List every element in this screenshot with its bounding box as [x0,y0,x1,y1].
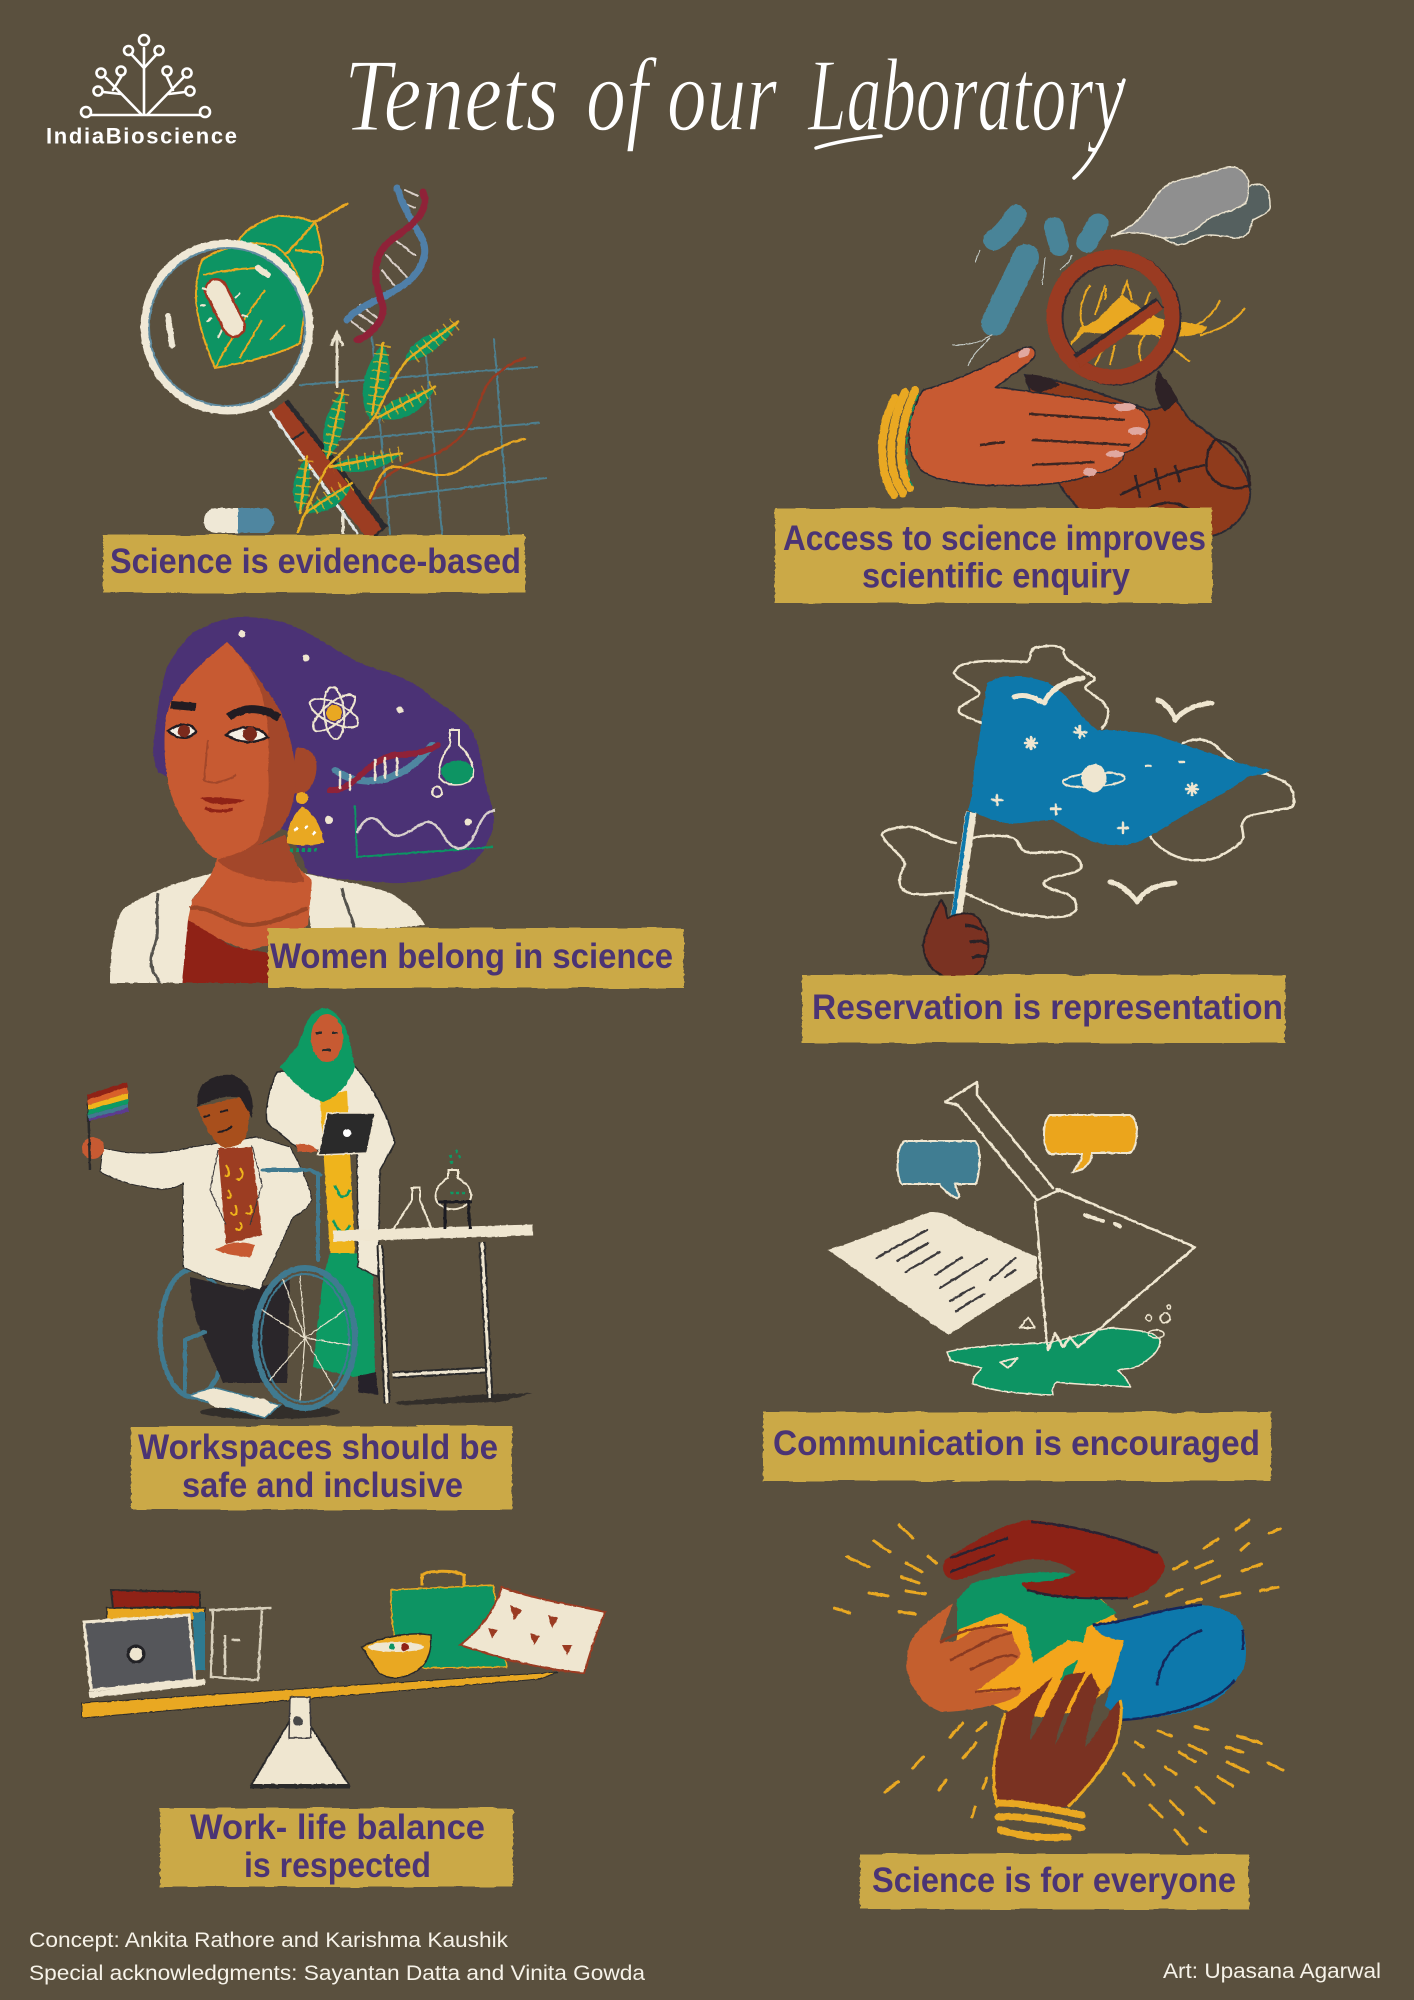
blue hand [1093,1605,1246,1720]
hand on lap [215,1243,255,1258]
back wheel [160,1269,226,1397]
shirt [182,920,270,983]
speech bubble: blue [897,1141,980,1198]
caption: workspaces should be safe and inclusive: safe and inclusive [182,1466,463,1505]
flask outline [945,1082,1195,1368]
raised hand [82,1137,104,1159]
title [344,38,1125,178]
title flourishes [816,80,1124,178]
caption: science is for everyone: Science is for everyone [872,1861,1236,1900]
magnifier handle [281,405,381,532]
ear [290,748,317,794]
yellow dress [320,1090,355,1253]
bacteria [994,215,1098,323]
books [111,1590,200,1608]
atom [306,686,362,740]
left hand [909,347,1149,486]
caption: access to science [775,508,1212,603]
mosquito [1067,295,1207,350]
credits: concept and acknowledgments [29,1929,645,1985]
coat [110,873,425,983]
caption: science is evidence-based: Science is evidence-based [110,542,521,581]
hair DNA [330,745,438,790]
footrest and shoes [188,1387,280,1418]
title: our [667,38,777,153]
credits: concept and acknowledgments: Special acknowledgments: Sayantan Datta and Vinita Gowda [29,1962,645,1985]
logo: IndiaBioscience: IndiaBioscience [46,124,237,148]
stars [992,726,1198,833]
illustration: communication flask [828,1082,1195,1395]
table [333,1230,533,1403]
beaker [209,1608,271,1680]
lens ring [145,244,309,410]
hijab [280,1008,355,1102]
top hand [943,1520,1165,1599]
left hand [907,1603,1021,1712]
credit: art: Art: Upasana Agarwal [1163,1960,1381,1983]
caption: reservation is representation [802,975,1285,1043]
caption: work-life balance is respected: is respected [244,1846,431,1885]
flask [439,730,473,785]
earring [296,792,308,804]
illustration: reservation flag [882,646,1294,992]
caption: access to science: Access to science improves [783,519,1206,558]
bowl [362,1634,431,1678]
pride flag [87,1082,129,1170]
green trousers [313,1253,375,1377]
right hand with henna [1025,371,1250,536]
woman coat [266,1067,395,1277]
caption: women belong in science [268,928,684,988]
globe [956,1577,1124,1717]
caption: work-life balance is respected: Work- life balance [190,1808,485,1847]
cloud [1163,184,1270,245]
caption: science is evidence-based [103,535,525,593]
rays [834,1520,1283,1844]
caption: communication is encouraged [763,1412,1271,1481]
credits: concept and acknowledgments: Concept: Ankita Rathore and Karishma Kaushik [29,1929,509,1952]
flag [968,677,1271,845]
lips [200,797,245,804]
illustration: access to science [882,167,1270,536]
saturn [1082,764,1106,792]
land [957,1572,1117,1663]
caption: workspaces should be safe and inclusive [131,1426,512,1510]
laptop [84,1615,195,1690]
illustration: work-life balance seesaw [82,1571,605,1787]
pill [204,508,238,533]
organism [216,290,234,326]
chart grid and curves [300,337,546,534]
caption: workspaces should be safe and inclusive: Workspaces should be [138,1428,498,1467]
birds [1014,678,1212,902]
pillow [460,1587,605,1673]
fulcrum [251,1707,349,1785]
illustration: safe and inclusive workspaces [82,1008,533,1419]
caption: access to science: scientific enquiry [862,556,1130,596]
green puddle [947,1328,1160,1395]
paper [828,1212,1037,1335]
plant [293,322,458,532]
title: Laboratory [807,38,1125,153]
bangles [882,390,918,495]
caption: communication is encouraged: Communication is encouraged [773,1424,1260,1463]
beam [82,1672,558,1718]
caption: science is for everyone [860,1854,1249,1909]
caption: reservation is representation: Reservation is representation [812,988,1283,1027]
hair [153,617,494,883]
face [165,642,295,858]
chalk clouds [882,646,1294,917]
magnified leaf [196,244,305,368]
flag pole [946,812,971,992]
logo: IndiaBioscience [46,35,237,148]
bracelets [998,1803,1082,1837]
neck and chest [188,840,312,950]
hair chart [355,805,493,857]
prohibition sign [1056,258,1174,378]
sweater [218,1147,262,1244]
wheelchair [185,1170,355,1410]
eyebrows and eyes [171,705,279,718]
floor shadows [200,1405,340,1419]
back leaf [238,216,323,297]
illustration: science is evidence-based [145,188,546,534]
caption: work-life balance is respected [160,1808,513,1887]
bubbles [1146,1305,1171,1338]
title: Tenets [344,38,559,153]
man trousers [190,1277,290,1383]
DNA [347,188,425,340]
title: of [586,38,657,153]
stars in hair [238,630,472,826]
suitcase [422,1571,464,1587]
up arrow [331,333,343,534]
lab flasks [393,1188,432,1230]
caption: women belong in science: Women belong in science [270,937,673,976]
bottom hand [994,1672,1121,1807]
laptop [318,1113,375,1155]
hand [923,900,988,979]
man head [197,1097,250,1148]
illustration: women belong in science [110,617,495,983]
speech bubble: yellow [1044,1115,1137,1172]
illustration: science is for everyone [834,1520,1283,1844]
man coat [100,1137,312,1290]
